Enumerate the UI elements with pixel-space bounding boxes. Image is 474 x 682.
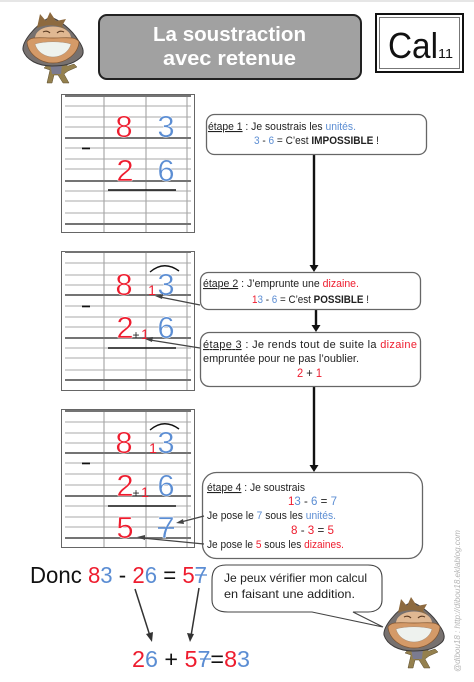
panel: notebook grid 1 [62,94,194,232]
result 57 [116,510,175,545]
arc over 13 [150,266,179,272]
number 8 and 13 with borrow: 3 [157,425,175,460]
number 83: 8 [115,109,133,144]
flow arrow: step 2 to step 3 [312,309,320,332]
equation: 26 + 57 = 83: 26 + 57=83 [132,646,250,672]
title banner: avec retenue [163,48,296,70]
equation: Donc 83 - 26 = 57: Donc 83 - 26 = 57 [30,562,207,588]
number 26: 2 [116,153,134,188]
speech bubble [212,565,383,627]
icon: mascot bottom right [384,597,444,668]
panel: step 2: étape 2 : J’emprunte une dizaine. [203,278,359,290]
arc over 13 [150,424,179,430]
number 2 plus 1 and 6: 2 [116,310,134,345]
panel: step 3: étape 3 : Je rends tout de suite la dizaine [203,339,417,351]
result 57: 7 [157,510,175,545]
number 83 [115,109,175,144]
reference label Cal 11 [376,14,463,72]
panel: step 3: 2 + 1 [297,366,322,380]
number 8 and 13 with borrow: 1 [149,440,157,456]
sum line [108,505,176,507]
panel: step 4 [202,472,422,558]
number 2 plus 1 and 6: 1 [141,484,149,500]
arrow: step 3 to added 1 [145,337,200,348]
number 2 plus 1 and 6 [116,468,175,503]
reference label Cal 11: 11 [438,46,453,61]
number 26: 6 [157,153,175,188]
speech bubble: en faisant une addition. [224,587,355,601]
speech bubble: Je peux vérifier mon calcul [224,571,367,585]
panel: notebook grid 3 [62,410,194,548]
number 2 plus 1 and 6: 1 [141,326,149,342]
flow arrow: step 3 to step 4 [310,386,318,472]
panel: step 4: 13 - 6 = 7 [288,494,337,508]
top edge band [0,0,474,2]
number 2 plus 1 and 6 [116,310,175,345]
arrow: 57 down to addition [187,588,199,642]
result 57: 5 [116,510,134,545]
panel: notebook grid 2 [62,252,194,390]
panel: step 4: Je pose le 7 sous les unités. [207,510,336,522]
number 2 plus 1 and 6: 6 [157,310,175,345]
number 8 and 13 with borrow: 8 [115,267,133,302]
panel: step 1: 3 - 6 = C’est IMPOSSIBLE ! [254,135,379,147]
flow arrow: step 1 to step 2 [310,154,318,272]
panel: step 4: 8 - 3 = 5 [291,523,334,537]
number 8 and 13 with borrow: 3 [157,267,175,302]
number 2 plus 1 and 6: 6 [157,468,175,503]
panel: step 1: étape 1 : Je soustrais les unités. [208,121,356,133]
panel: step 2 [200,272,420,310]
number 8 and 13 with borrow: 8 [115,425,133,460]
number 2 plus 1 and 6: 2 [116,468,134,503]
panel: step 4: étape 4 : Je soustrais [207,482,305,494]
icon: mascot top left [23,12,83,83]
number 8 and 13 with borrow [115,267,175,302]
minus sign [82,462,90,464]
number 2 plus 1 and 6: + [132,486,140,500]
arrow: step 4 to digit 5 [137,535,204,544]
panel: step 1 [206,114,426,154]
panel: step 2: 13 - 6 = C’est POSSIBLE ! [252,294,369,306]
number 83: 3 [157,109,175,144]
number 8 and 13 with borrow: 1 [148,282,156,298]
title banner: La soustraction [153,24,306,46]
number 26 [116,153,175,188]
arrow: 26 down to addition [135,589,153,642]
number 8 and 13 with borrow [115,425,175,460]
sum line [108,347,176,349]
title banner [99,15,361,79]
number 2 plus 1 and 6: + [132,328,140,342]
sum line [108,189,176,191]
panel: step 4: Je pose le 5 sous les dizaines. [207,539,344,551]
minus sign [82,306,90,307]
arrow: step 2 to borrowed 1 [155,294,200,305]
minus sign [82,148,90,149]
watermark: @dibou18 : http://dibou18.eklablog.com [453,530,462,672]
arrow: step 4 to digit 7 [176,516,204,524]
reference label Cal 11: Cal [388,25,438,66]
panel: step 3 [200,332,420,386]
panel: step 3: empruntée pour ne pas l’oublier. [203,353,359,365]
